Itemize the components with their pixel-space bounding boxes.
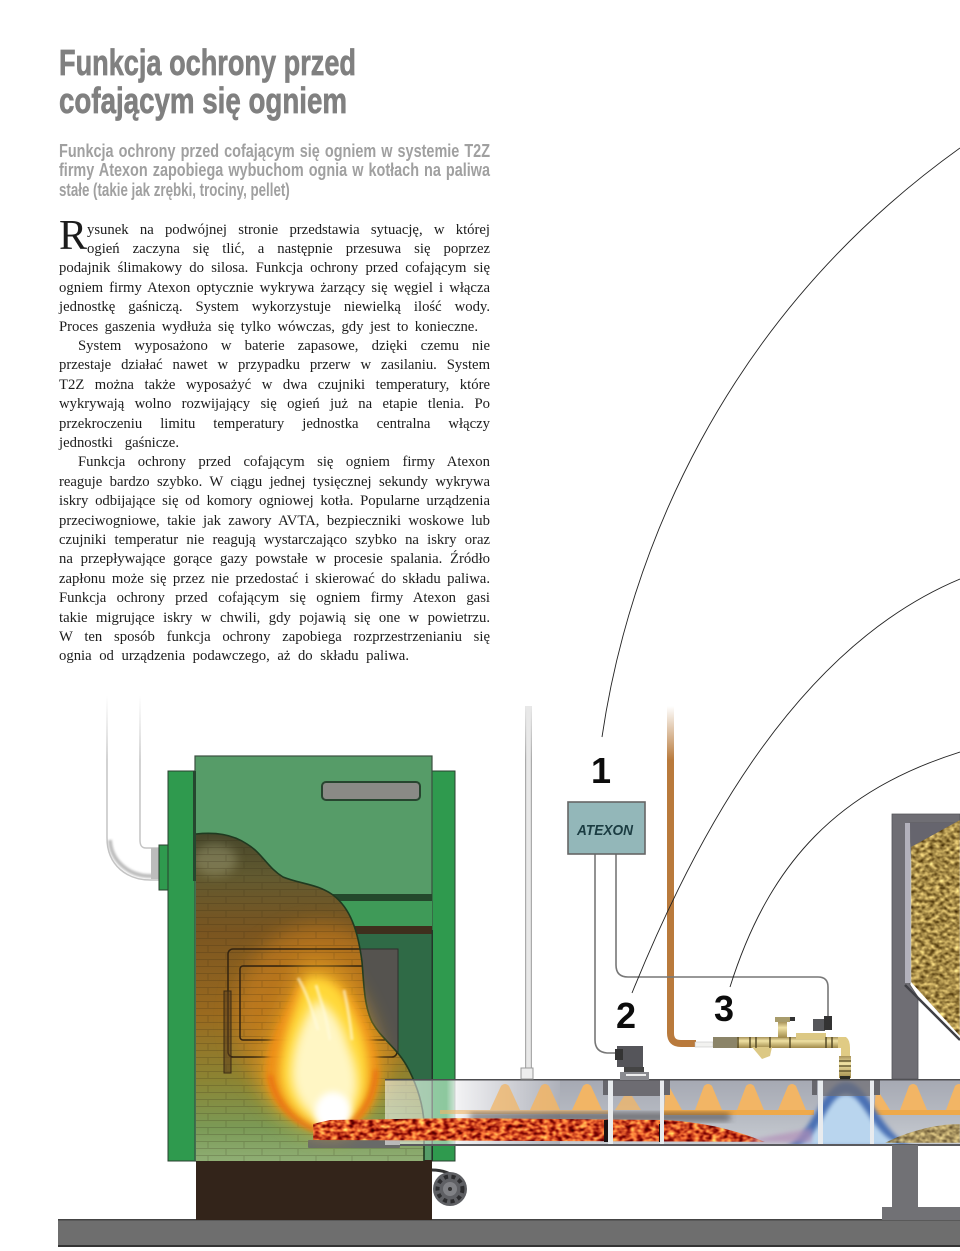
drop cap: R	[59, 213, 87, 259]
paragraph 3: zapłonu może się przez nie przedostać i skierować do składu paliwa.	[59, 571, 490, 587]
wood chips in tube	[885, 1124, 960, 1143]
paragraph 3	[59, 454, 490, 664]
paragraph 3: takie migrujące iskry w chwili, gdy pojawią się one w powietrzu.	[59, 610, 490, 626]
flue collar	[159, 845, 169, 890]
subheading: stałe (takie jak zrębki, trociny, pellet)	[59, 179, 290, 200]
auger flights	[440, 1084, 960, 1115]
paragraph 2: przestaje działać nawet w przypadku przerw w zasilaniu. System	[59, 357, 490, 373]
number 1: 1	[591, 750, 611, 791]
paragraph 2	[58, 338, 490, 451]
number 2: 2	[616, 995, 636, 1036]
base	[196, 1160, 432, 1220]
extinguishing valve assembly	[695, 1016, 851, 1079]
firebox cutaway with bricks and flame	[193, 833, 428, 1161]
control unit wires	[595, 854, 828, 1053]
paragraph 3: czujniki temperatur nie reagują wystarczająco szybko na iskry oraz	[59, 532, 490, 548]
paragraph 1: podajnik ślimakowy do silosa. Funkcja ochrony przed cofającym się	[59, 260, 490, 276]
furnace door outline	[228, 949, 397, 1057]
paragraph 2: System wyposażono w baterie zapasowe, dzięki czemu nie	[78, 338, 490, 354]
water supply pipe (left, grey)	[521, 706, 533, 1079]
floor	[58, 1207, 960, 1247]
flue pipe	[107, 695, 159, 880]
paragraph 3: W ten sposób funkcja ochrony zapobiega rozprzestrzenianiu się	[59, 629, 490, 645]
paragraph 2: T2Z można także wyposażyć w dwa czujniki temperatury, które	[59, 377, 490, 393]
ATEXON control box	[568, 802, 645, 854]
number 3: 3	[714, 988, 734, 1029]
paragraph 3: przeciwogniowe, takie jak zawory AVTA, bezpieczniki woskowe lub	[59, 513, 490, 529]
brick wall	[196, 834, 428, 1161]
paragraph 1	[58, 222, 490, 335]
grate	[308, 1140, 400, 1148]
paragraph 2: przekroczeniu limitu temperatury jednostka centralna włączy	[59, 416, 490, 432]
left side panel	[168, 771, 196, 1161]
title	[59, 42, 356, 121]
optical sensor	[615, 1046, 649, 1080]
boiler casing	[159, 756, 467, 1220]
paragraph 1: Proces gaszenia wydłuża się tylko wówczas, gdy jest to konieczne.	[59, 319, 478, 335]
hopper with wood chips	[892, 814, 960, 1207]
paragraph 3: Funkcja ochrony przed cofającym się ogniem firmy Atexon gasi	[59, 590, 490, 606]
door seen through casing	[355, 949, 398, 1057]
ATEXON control box: ATEXON	[576, 822, 634, 839]
title: cofającym się ogniem	[59, 80, 347, 121]
paragraph 1: ogniem firmy Atexon optycznie wykrywa żarzący się węgiel i włącza	[59, 280, 490, 296]
subheading: firmy Atexon zapobiega wybuchom ognia w kotłach na paliwa	[59, 159, 490, 180]
subheading: Funkcja ochrony przed cofającym się ogniem w systemie T2Z	[59, 140, 490, 161]
control slot	[322, 782, 420, 800]
main body	[195, 756, 432, 1161]
smoke above embers	[470, 1113, 730, 1121]
leader curves	[602, 148, 960, 993]
copper water pipe	[670, 706, 696, 1044]
paragraph 1: jednostkę gaśniczą. System wykorzystuje niewielką ilość wody.	[59, 299, 490, 315]
title: Funkcja ochrony przed	[59, 42, 356, 83]
paragraph 2: wykrywają wolno rozwijający się ogień już na etapie tlenia. Po	[59, 396, 490, 412]
lower casing bands	[320, 894, 432, 901]
paragraph 3: Funkcja ochrony przed cofającym się ogniem firmy Atexon	[78, 454, 490, 470]
door handle	[224, 991, 231, 1073]
paragraph 1: ysunek na podwójnej stronie przedstawia sytuację, w której	[87, 222, 490, 238]
paragraph 3: ognia od urządzenia podawczego, aż do składu paliwa.	[59, 648, 409, 664]
paragraph 3: reaguje bardzo szybko. W ciągu jednej tysięcznej sekundy wykrywa	[59, 474, 490, 490]
right side panel	[432, 771, 455, 1161]
paragraph 3: iskry odbijające się od komory ogniowej kotła. Popularne urządzenia	[59, 493, 490, 509]
hopper frame	[892, 814, 960, 1079]
wheel	[432, 1170, 467, 1206]
tube sockets and seams	[603, 1080, 880, 1144]
feed auger tube	[313, 1079, 960, 1146]
flame	[263, 961, 381, 1136]
paragraph 1: ogień zaczyna się tlić, a następnie przesuwa się poprzez	[87, 241, 490, 257]
embers	[313, 1118, 765, 1142]
subheading	[59, 140, 490, 200]
paragraph 2: jednostki gaśnicze.	[59, 435, 179, 451]
water spray	[745, 1082, 915, 1146]
paragraph 3: na przepływające gorące gazy powstałe w procesie spalania. Źródło	[59, 551, 490, 567]
wood chips	[911, 820, 960, 1036]
tube body	[385, 1080, 560, 1145]
